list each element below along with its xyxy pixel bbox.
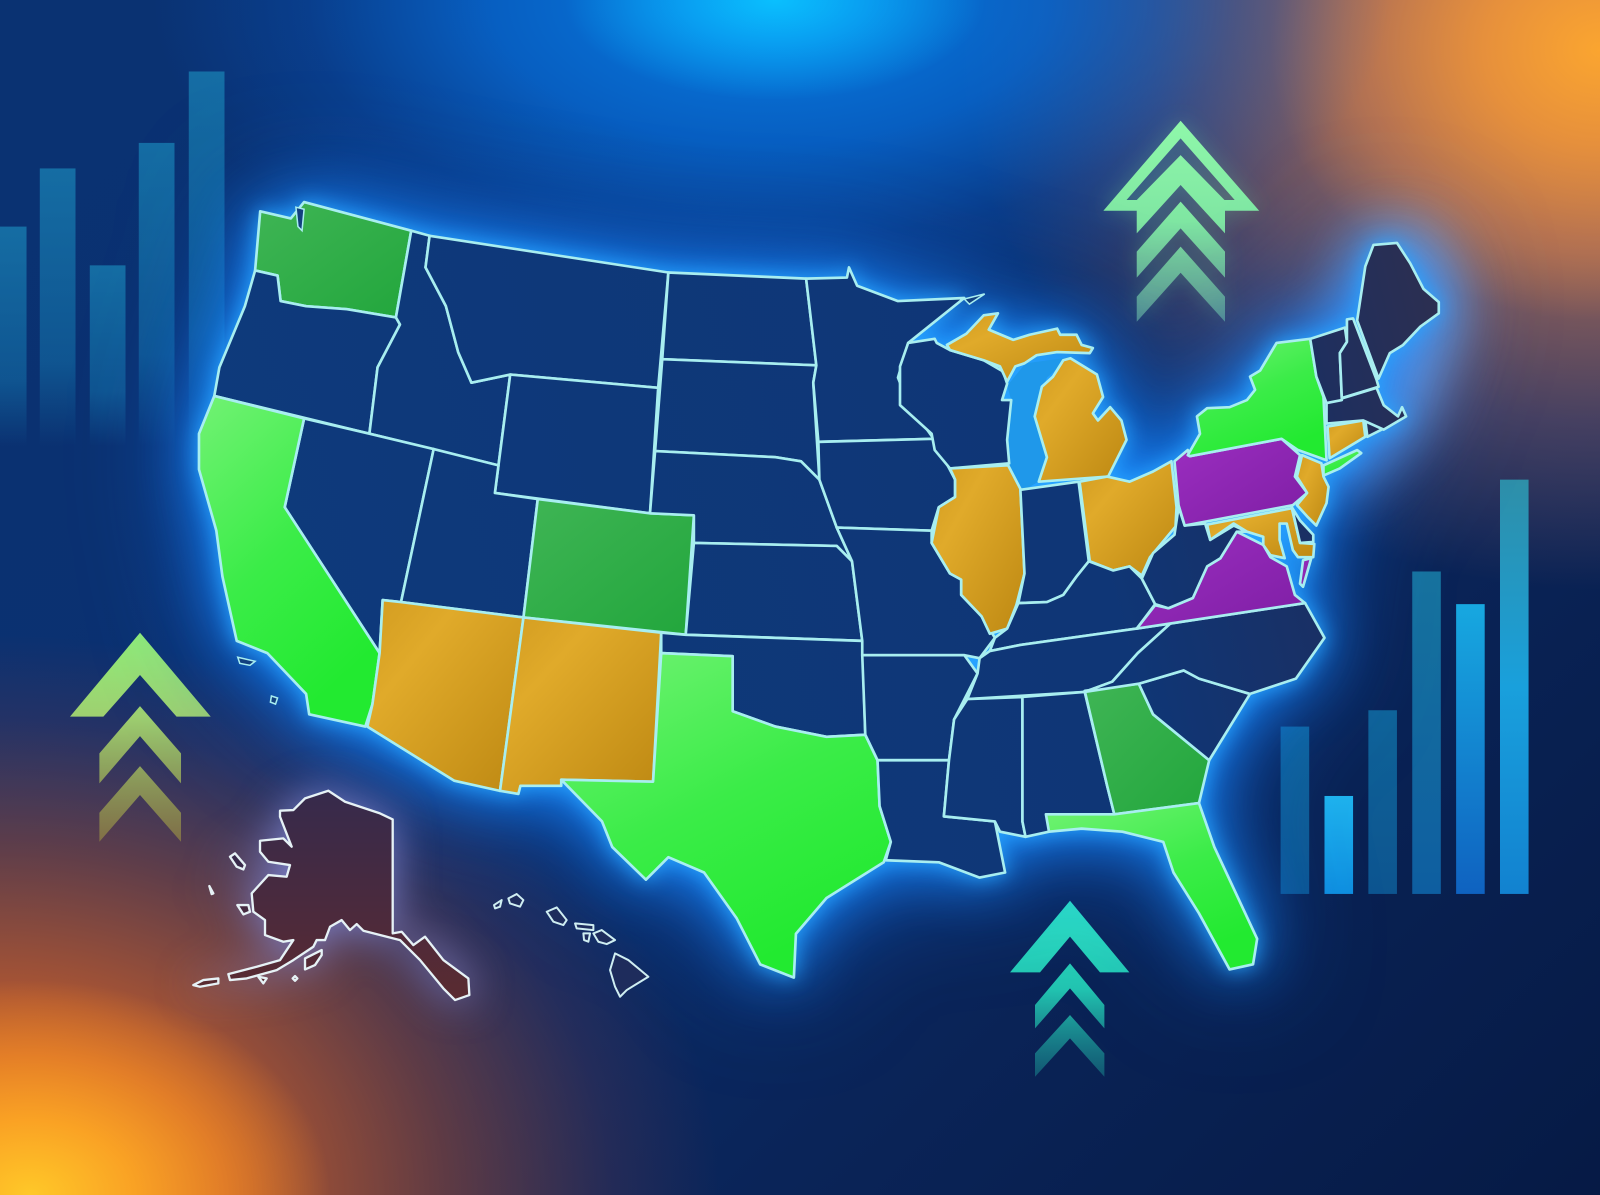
state: Tennessee bbox=[967, 624, 1170, 699]
state: California bbox=[199, 396, 380, 727]
state: Indiana bbox=[1018, 482, 1089, 603]
state: North Dakota bbox=[662, 272, 816, 365]
Lake Michigan bbox=[1007, 357, 1070, 492]
state: Louisiana bbox=[878, 760, 1005, 878]
state: Nebraska bbox=[650, 451, 852, 561]
state: Vermont bbox=[1310, 328, 1347, 403]
state: Washington bbox=[255, 202, 411, 317]
state: Alabama bbox=[1022, 692, 1114, 837]
state: Oregon bbox=[214, 270, 400, 434]
state: Oklahoma bbox=[661, 633, 865, 737]
state: Virginia eastern shore bbox=[1300, 558, 1311, 587]
state: Colorado bbox=[523, 499, 694, 635]
state: Wyoming bbox=[495, 375, 658, 513]
state: Idaho bbox=[369, 231, 510, 465]
state: Arizona bbox=[367, 600, 523, 791]
small coastal islands bbox=[238, 207, 985, 704]
state: New York Long Island bbox=[1323, 450, 1361, 476]
state: New York bbox=[1188, 339, 1327, 460]
state: New Jersey bbox=[1297, 455, 1329, 526]
state: New Hampshire bbox=[1340, 318, 1379, 398]
state: North Carolina bbox=[1085, 603, 1324, 694]
state: Michigan upper peninsula bbox=[947, 313, 1093, 382]
state: Wisconsin bbox=[900, 339, 1011, 468]
state: Nevada bbox=[285, 418, 434, 653]
state: Kentucky bbox=[990, 561, 1155, 651]
map: Alaska bbox=[193, 791, 469, 1000]
state: Florida bbox=[1046, 803, 1257, 969]
state: New Mexico bbox=[500, 617, 661, 794]
map: contiguous states bbox=[199, 202, 1439, 978]
state: Kansas bbox=[686, 543, 862, 641]
state: Virginia bbox=[1137, 532, 1305, 629]
arrow: left bbox=[70, 633, 211, 842]
state: Michigan lower peninsula bbox=[1035, 358, 1127, 482]
state: Arkansas bbox=[862, 655, 978, 760]
state: Delaware bbox=[1292, 507, 1313, 543]
state: Rhode Island bbox=[1365, 420, 1384, 437]
Alaska mainland bbox=[228, 791, 469, 1000]
state: Pennsylvania bbox=[1174, 439, 1307, 526]
state: West Virginia bbox=[1142, 507, 1247, 608]
bar chart: right bbox=[1281, 480, 1529, 894]
state: Connecticut bbox=[1328, 420, 1365, 458]
Alaska islands bbox=[193, 853, 322, 987]
state: Maryland bbox=[1207, 508, 1314, 558]
state: South Carolina bbox=[1139, 670, 1250, 760]
state: Georgia bbox=[1085, 684, 1209, 814]
state: Massachusetts bbox=[1327, 388, 1406, 430]
state: Minnesota bbox=[806, 267, 964, 442]
state: Missouri bbox=[837, 528, 995, 658]
state: Texas bbox=[561, 653, 891, 978]
state: Montana bbox=[426, 236, 668, 388]
state: Iowa bbox=[818, 439, 955, 531]
glow: New England bbox=[1296, 230, 1459, 480]
state: Utah bbox=[401, 449, 538, 617]
state: Maine bbox=[1357, 243, 1439, 379]
arrow: bottom bbox=[1010, 901, 1129, 1077]
state: Ohio bbox=[1080, 461, 1177, 576]
bar chart: left bbox=[0, 71, 224, 446]
state: South Dakota bbox=[655, 359, 819, 480]
state: Mississippi bbox=[944, 697, 1026, 837]
map: Hawaii bbox=[494, 894, 648, 997]
arrow: top right bbox=[1103, 121, 1259, 322]
state: Illinois bbox=[932, 465, 1024, 634]
